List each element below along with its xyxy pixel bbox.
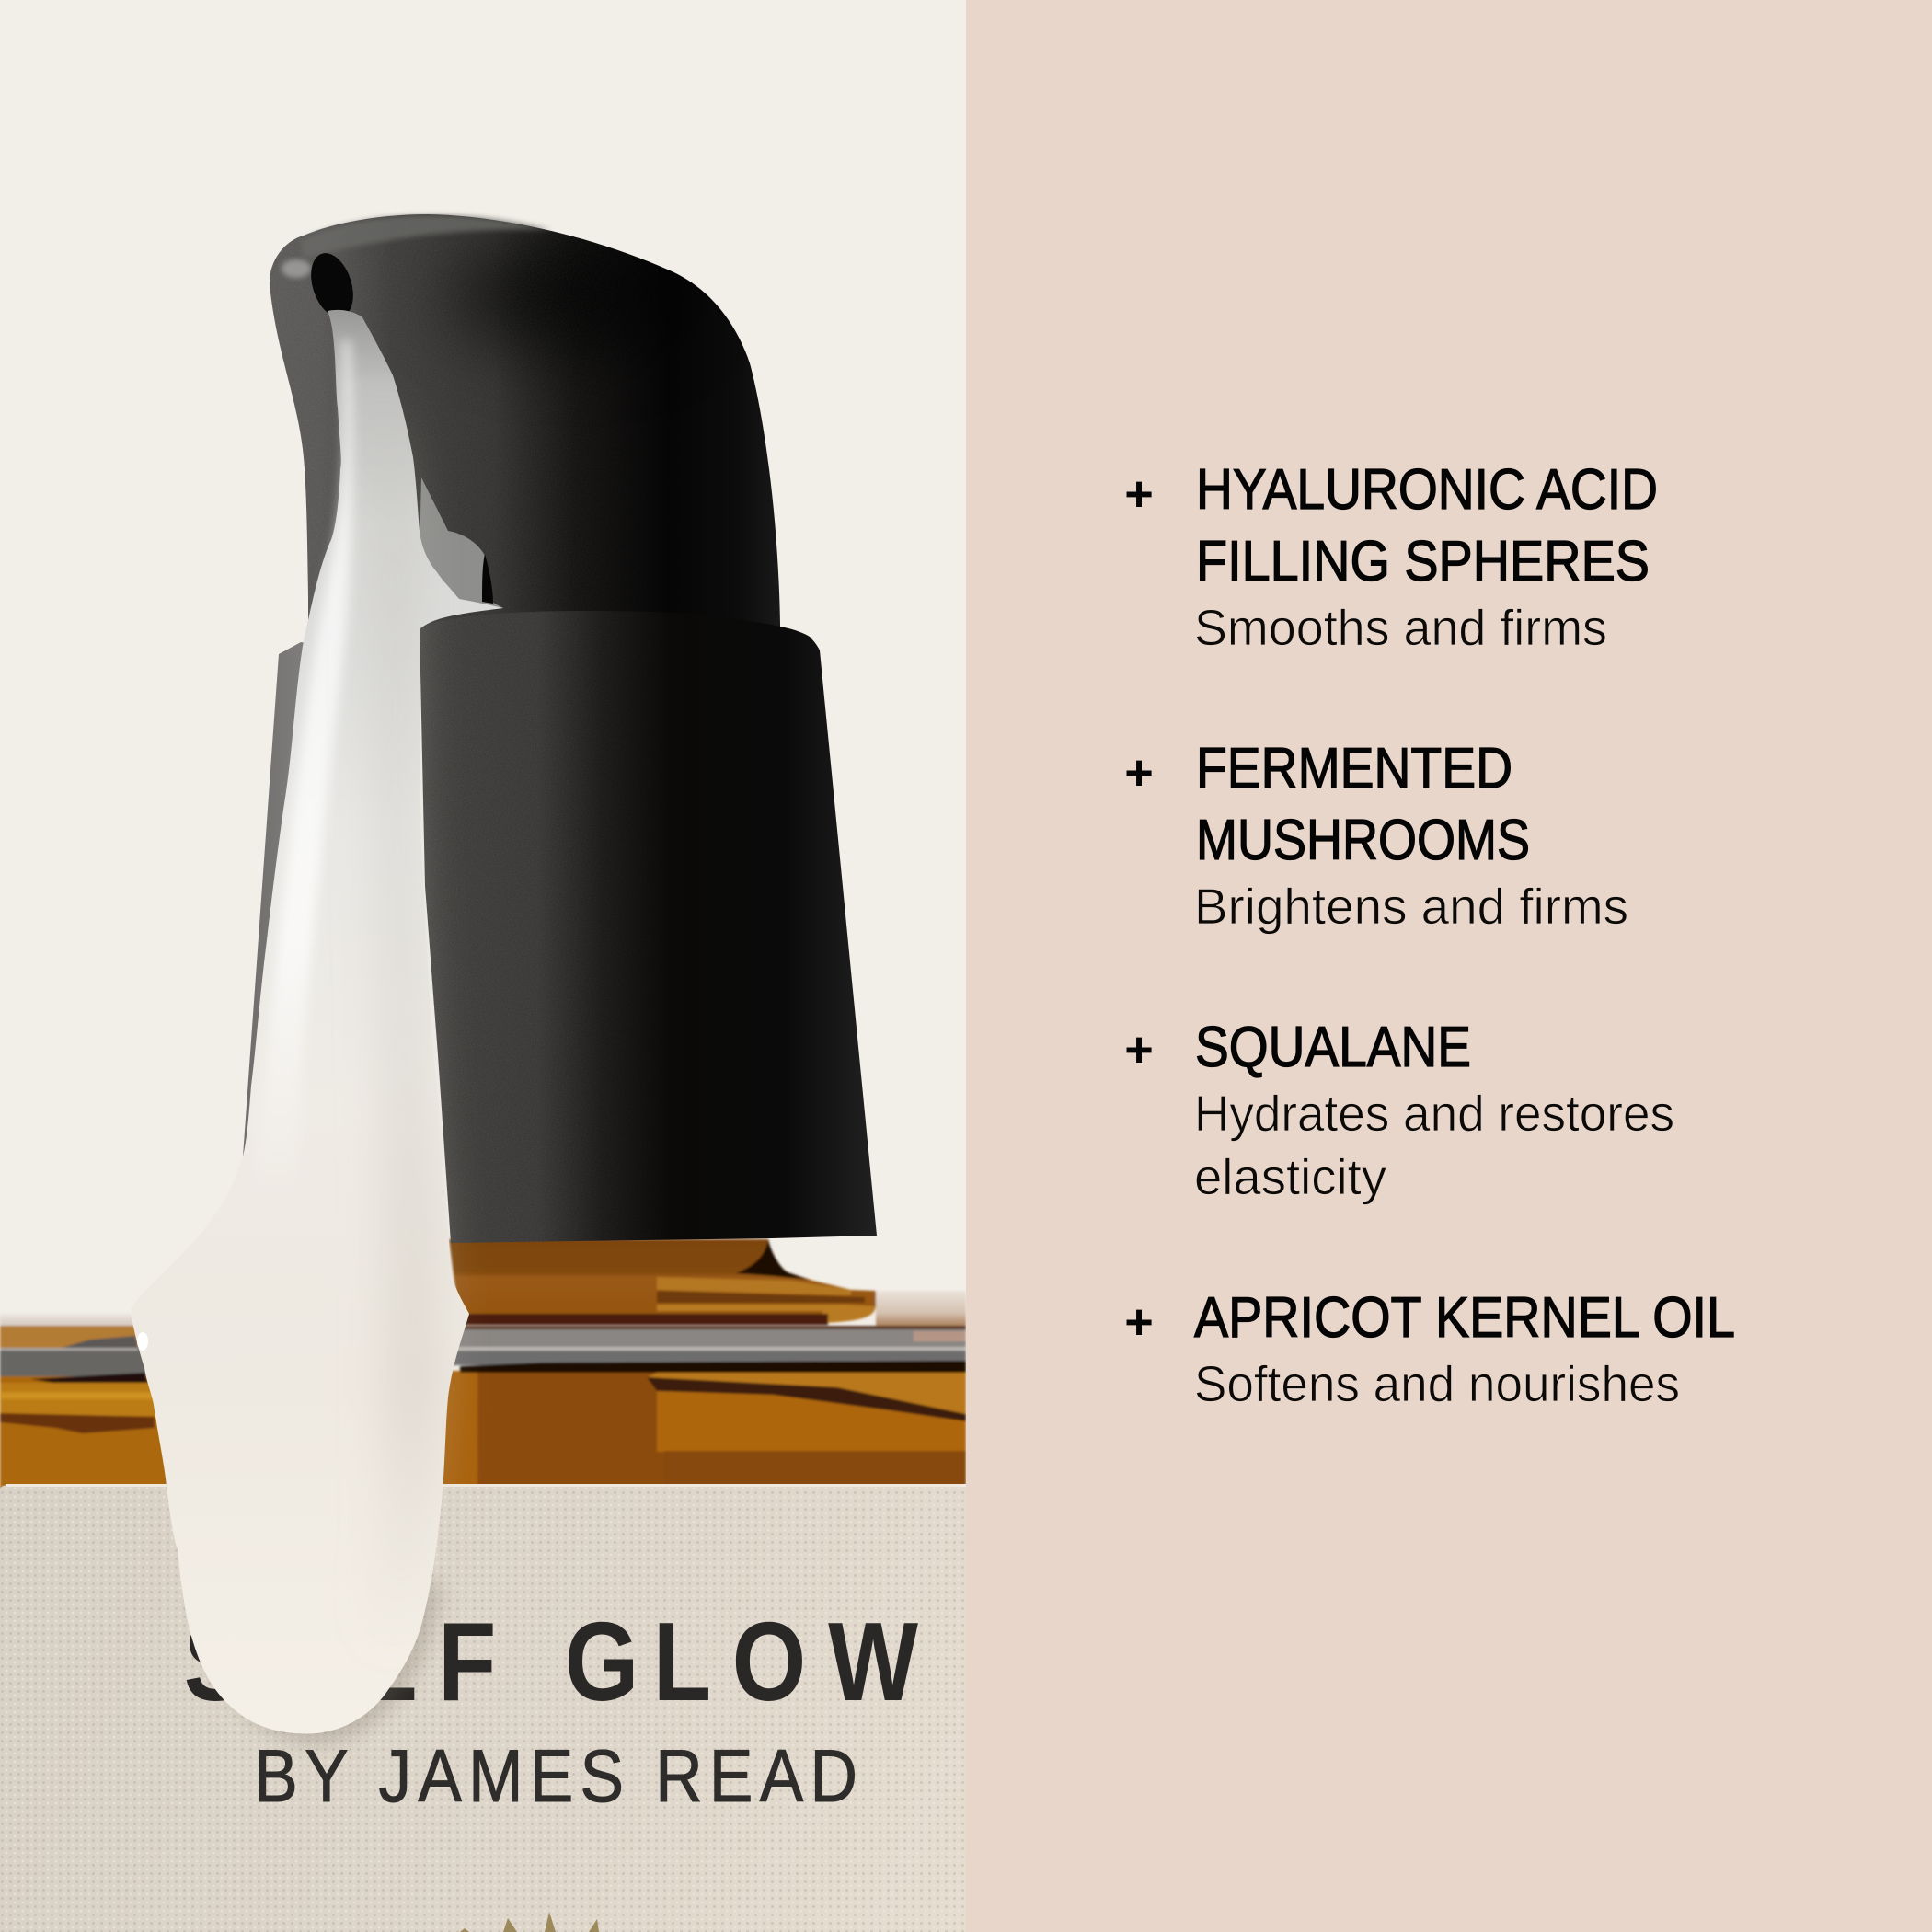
ingredient 2: fermented mushrooms [1124,736,1628,935]
nozzle highlight [282,259,311,278]
nozzle opening [311,253,353,314]
ingredient 1: hyaluronic acid [1124,457,1658,656]
description 2: Brightens and firms [1194,878,1628,935]
head surface grain [270,230,615,626]
cream specular glint [137,1332,148,1351]
background: right panel [966,0,1932,1932]
plus bullet 2: + [1124,745,1154,800]
head glossy rim [300,215,552,258]
label sub-brand: BY JAMES READ: BY JAMES READ [254,1735,857,1818]
description 3 line 2: elasticity [1194,1148,1386,1205]
cream shadow on label [237,1578,445,1750]
panel: product photo [0,0,966,1932]
pump collar [420,611,877,1243]
cream bright left highlight [272,337,357,1075]
description 3 line 1: Hydrates and restores [1194,1085,1674,1142]
pump collar: rear sliver [243,642,304,1156]
heading 4: APRICOT KERNEL OIL [1194,1285,1735,1350]
plus bullet 3: + [1124,1022,1154,1077]
collar surface grain [420,611,624,1242]
heading 2 line 2: MUSHROOMS [1196,808,1530,872]
ingredient 3: squalane [1124,1015,1674,1205]
cream right shading [368,396,440,1656]
glossy cream drip [131,310,503,1733]
product label [0,1484,966,1932]
cream web between head and collar [420,477,503,615]
label emblem tips [460,1912,599,1932]
heading 1 line 1: HYALURONIC ACID [1196,457,1658,522]
plus bullet 4: + [1124,1294,1154,1350]
ingredient 4: apricot kernel oil [1124,1285,1735,1412]
panel: ingredient list [1124,457,1735,1412]
pump head [270,214,780,644]
label wordmark: SELF GLOW: SELF GLOW [184,1599,918,1724]
head top shading [451,239,690,350]
web black droplets [482,554,493,604]
heading 3: SQUALANE [1195,1015,1471,1079]
description 4: Softens and nourishes [1194,1355,1680,1412]
description 1: Smooths and firms [1194,599,1607,656]
plus bullet 1: + [1124,466,1154,522]
photo backdrop [0,0,966,1489]
heading 1 line 2: FILLING SPHERES [1196,529,1650,593]
heading 2 line 1: FERMENTED [1196,736,1512,800]
amber glass bottle [0,1239,966,1489]
